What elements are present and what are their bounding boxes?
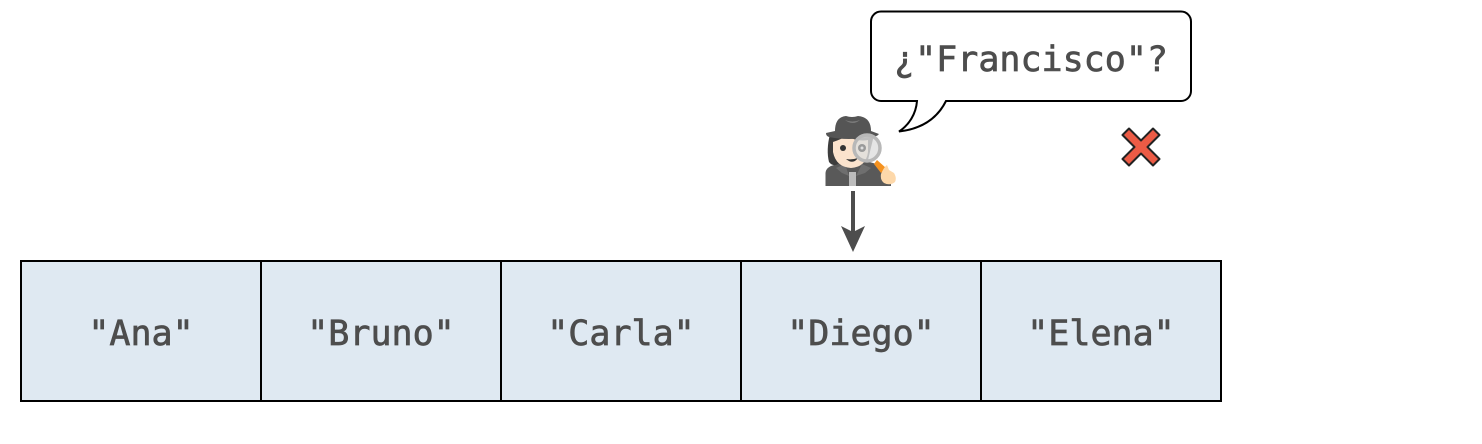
array cell: Bruno	[261, 261, 501, 401]
array cell: Carla	[501, 261, 741, 401]
array cell: Diego	[741, 261, 981, 401]
array cell: Diego: "Diego"	[787, 314, 935, 354]
array of names	[21, 261, 1221, 401]
magnifying glass lens	[854, 135, 880, 161]
speech bubble text: ¿"Francisco"?	[894, 40, 1168, 80]
detective hat	[826, 116, 879, 139]
icon: red cross	[1122, 128, 1160, 166]
magnifying glass handle	[874, 160, 886, 173]
arrow pointing to current cell	[841, 191, 865, 252]
detective hair	[828, 134, 874, 165]
detective body	[826, 161, 891, 186]
array cell: Bruno: "Bruno"	[307, 314, 455, 354]
array cell: Elena	[981, 261, 1221, 401]
array cell: Ana	[21, 261, 261, 401]
detective hand	[881, 165, 896, 184]
array cell: Elena: "Elena"	[1027, 314, 1175, 354]
icon: detective with magnifying glass	[826, 116, 896, 186]
speech bubble	[871, 12, 1191, 132]
array cell: Carla: "Carla"	[547, 314, 695, 354]
array cell: Ana: "Ana"	[88, 314, 194, 354]
detective face	[833, 136, 868, 168]
